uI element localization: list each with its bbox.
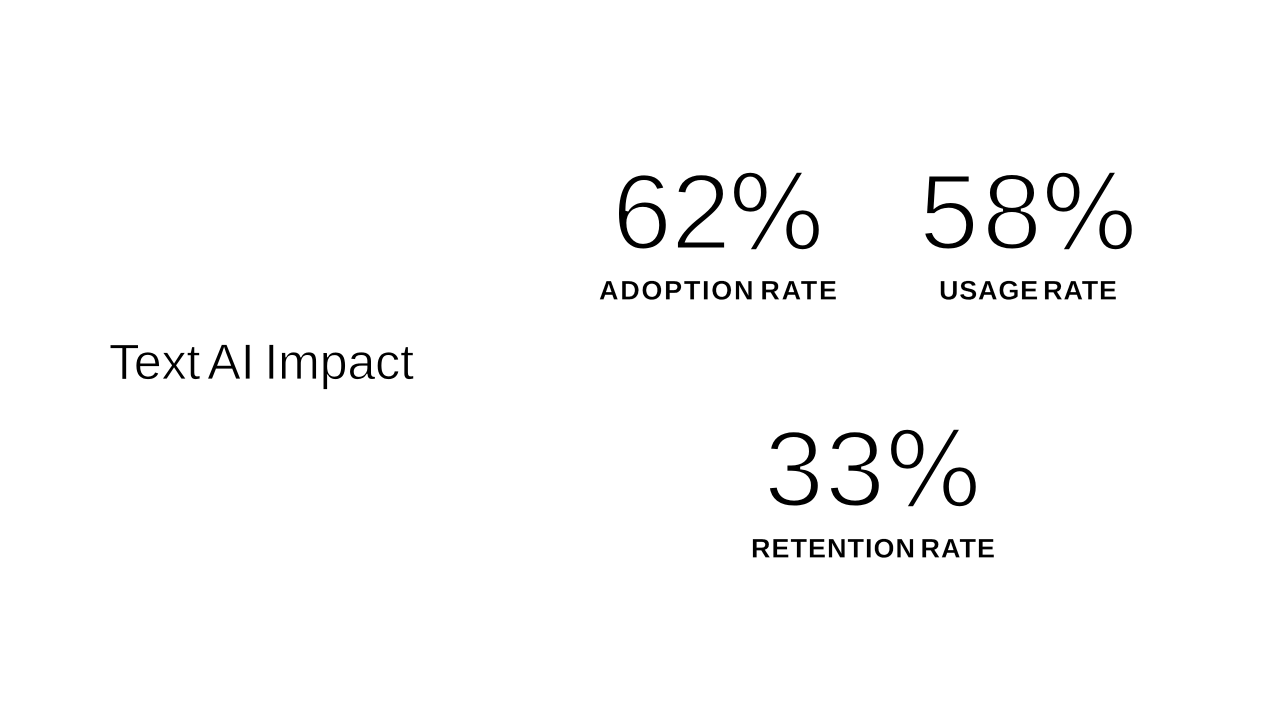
stat: adoption rate bbox=[599, 151, 837, 306]
value: 62%: % bbox=[727, 152, 826, 274]
stat: usage rate bbox=[919, 151, 1139, 306]
value: 62%: 62 bbox=[612, 151, 731, 272]
value: 33%: 33 bbox=[764, 408, 885, 529]
stat: retention rate bbox=[751, 408, 995, 564]
label: usage rate: USAGE RATE bbox=[939, 276, 1117, 306]
value: 58%: 58 bbox=[919, 151, 1042, 272]
value: 33%: % bbox=[884, 409, 983, 531]
label: retention rate: RETENTION RATE bbox=[751, 534, 995, 564]
label: adoption rate: ADOPTION RATE bbox=[599, 276, 837, 306]
title: Text AI Impact bbox=[109, 334, 414, 390]
value: 58%: % bbox=[1040, 152, 1139, 274]
